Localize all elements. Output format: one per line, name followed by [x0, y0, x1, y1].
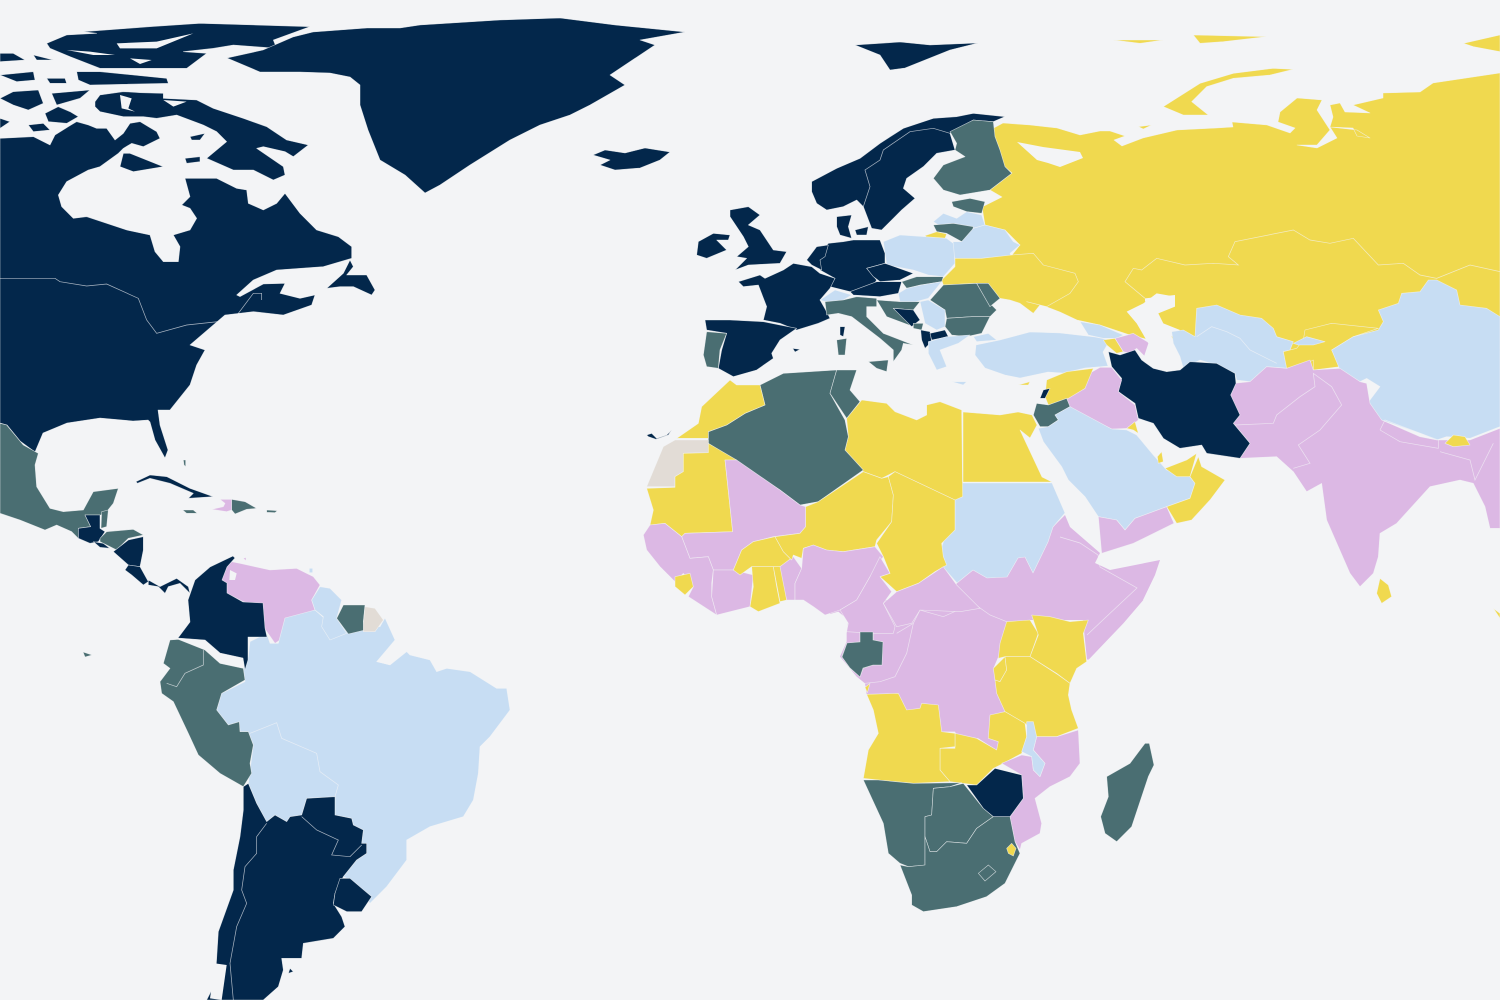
Cuba: [136, 475, 213, 498]
Fergana valley: [1293, 337, 1325, 345]
North Macedonia: [930, 330, 948, 340]
Ireland: [697, 233, 730, 258]
Ghana: [750, 567, 780, 612]
Cyprus: [1018, 382, 1030, 385]
Finland: [933, 120, 1012, 195]
Haiti: [212, 499, 232, 512]
Ecuador border: [167, 650, 203, 687]
Crete: [952, 382, 967, 385]
Serbia: [920, 300, 945, 330]
Bosnia: [893, 308, 920, 327]
Nepal border: [1380, 420, 1438, 448]
Romania: [930, 283, 997, 318]
DR Congo and neighbours: [830, 600, 1143, 750]
Caspian Sea: [1127, 293, 1180, 372]
Aruba: [243, 557, 246, 561]
Colombia: [178, 556, 267, 670]
Canada-USA border: [0, 278, 262, 333]
Sri Lanka: [1377, 578, 1392, 603]
Uzbekistan-Turkmenistan border: [1197, 327, 1277, 363]
South Asia: [1230, 360, 1500, 587]
Czechia: [867, 263, 913, 282]
Switzerland: [820, 290, 852, 302]
Patagonian fjords: [210, 963, 227, 1000]
Newfoundland: [327, 260, 375, 295]
Ellesmere Island: [47, 23, 310, 68]
Greece: [928, 335, 970, 370]
Niger: [775, 472, 893, 560]
Syria: [1045, 368, 1093, 405]
Iran: [1108, 350, 1250, 458]
Sierra Leone: [675, 573, 693, 595]
Burkina Faso: [733, 537, 792, 575]
Suriname: [337, 605, 365, 634]
Madagascar: [1101, 743, 1154, 842]
Namibia: [863, 780, 962, 867]
Arctic islands: [0, 53, 205, 172]
South Asia borders: [1235, 373, 1342, 468]
Tanzania: [995, 657, 1078, 737]
Western Sahara: [647, 440, 708, 487]
Falkland-side islet: [288, 968, 293, 973]
Estonia: [952, 198, 985, 213]
Amazon mouth: [377, 647, 395, 665]
Arctic channels: [67, 33, 193, 112]
Kolguev: [1138, 125, 1152, 129]
Lithuania: [933, 223, 973, 242]
Uzbekistan and Turkmenistan: [1172, 305, 1293, 382]
Canary Islands: [647, 430, 672, 439]
Georgia: [1080, 322, 1123, 338]
Egypt: [963, 412, 1052, 482]
Norway and Sweden: [812, 113, 1005, 230]
Trinidad: [309, 568, 313, 573]
mainland Canada and USA: [0, 122, 352, 458]
Zambia: [940, 712, 1027, 785]
Denmark: [837, 215, 852, 238]
Spain: [705, 320, 797, 377]
Congo border: [865, 623, 913, 683]
UAE: [1165, 453, 1197, 477]
region: South America: [160, 610, 510, 1000]
Portugal: [703, 332, 727, 368]
Cabinda: [865, 683, 870, 693]
Algeria: [708, 370, 863, 505]
Kenya: [1030, 615, 1088, 683]
Oman: [1167, 457, 1225, 523]
Eswatini: [1007, 843, 1016, 856]
Armenia: [1103, 338, 1123, 353]
Severnaya Zemlya: [1463, 35, 1500, 52]
Ethiopia, South Sudan and Somalia: [940, 515, 1160, 660]
Lake Maracaibo: [229, 570, 237, 580]
Zimbabwe: [967, 768, 1023, 817]
region: Central and Southern Africa: [830, 600, 1154, 912]
Uruguay: [333, 878, 372, 912]
Rwanda and Burundi: [993, 657, 1007, 682]
Venezuela: [222, 562, 320, 643]
Greenland: [227, 18, 685, 193]
Ethiopia and Somalia borders: [1060, 537, 1137, 635]
Baffin Island: [95, 92, 308, 180]
Kuwait: [1127, 422, 1138, 433]
Saudi Arabia: [1038, 407, 1195, 530]
Central African Republic: [883, 567, 980, 627]
Costa Rica: [125, 565, 148, 585]
region: North and West Africa: [643, 370, 980, 633]
Latvia: [933, 212, 985, 228]
region: Mexico, Central America and Caribbean: [0, 423, 320, 643]
Yemen: [1098, 507, 1174, 553]
Tunisia: [830, 370, 860, 418]
Bolivia border: [250, 723, 338, 797]
Mexico: [0, 423, 118, 538]
Ukraine: [942, 253, 1078, 313]
Qatar: [1157, 452, 1163, 463]
Croatia and Slovenia: [877, 300, 920, 327]
Iraq: [1067, 367, 1138, 429]
Dominican Republic: [232, 499, 257, 514]
Kazakhstan border: [1125, 230, 1500, 298]
Jamaica: [183, 510, 197, 513]
Turkish Thrace: [973, 333, 997, 342]
Chad: [877, 472, 955, 592]
Paraguay-Argentina border: [302, 817, 362, 857]
Morocco: [677, 380, 765, 438]
Slovakia: [902, 277, 943, 288]
Guatemala: [78, 515, 105, 543]
Brazil: [217, 610, 510, 903]
Puerto Rico: [267, 510, 277, 513]
Svalbard: [855, 42, 978, 70]
Gabon overlay: [842, 632, 883, 677]
Germany: [820, 240, 885, 292]
Guyana: [312, 587, 347, 640]
Benin: [780, 557, 802, 600]
Albania: [921, 330, 932, 348]
Jordan and Israel: [1033, 398, 1070, 427]
region: Middle East and Asia: [1033, 280, 1500, 618]
Bhutan: [1445, 435, 1470, 447]
Mozambique: [1002, 730, 1080, 850]
Angola: [863, 693, 955, 783]
El Salvador: [93, 542, 110, 548]
Galapagos: [83, 652, 92, 657]
Aral Sea: [1145, 295, 1175, 302]
Cameroon: [840, 557, 895, 633]
Ivory Coast: [712, 570, 753, 615]
Botswana: [925, 783, 993, 852]
Franz Josef Land: [1113, 40, 1163, 43]
Kyrgyzstan and Tajikistan: [1283, 323, 1378, 370]
Netherlands and Belgium: [807, 245, 828, 270]
Turkey: [975, 332, 1110, 378]
Malawi: [1022, 722, 1045, 777]
Gabon: [842, 632, 883, 677]
Mauritania: [647, 443, 737, 537]
France: [738, 263, 835, 330]
Bulgaria: [945, 317, 990, 337]
Honduras: [100, 529, 143, 550]
Togo: [773, 567, 787, 602]
Chile, Argentina and Paraguay: [207, 783, 367, 1000]
region: Canada and United States: [0, 23, 375, 458]
Sardinia: [837, 338, 847, 355]
Nigeria: [795, 545, 883, 615]
Peru and Ecuador: [160, 639, 253, 787]
Lesotho: [978, 865, 996, 881]
Sicily: [868, 360, 888, 372]
Danish islands: [855, 227, 868, 235]
Russia and Kazakhstan: [982, 73, 1500, 370]
Libya: [845, 400, 963, 500]
Mali: [682, 460, 806, 570]
Belarus: [952, 225, 1020, 258]
Poland: [883, 235, 955, 277]
Senegal and Guinea: [643, 523, 717, 615]
Austria: [850, 282, 902, 297]
Chile-Argentina border: [230, 823, 267, 1000]
Sumatra tip: [1493, 608, 1500, 618]
Lebanon: [1040, 388, 1050, 398]
Nicaragua: [113, 537, 143, 567]
Balearic Islands: [793, 348, 800, 352]
Hungary: [898, 282, 942, 303]
region: Guianas: [178, 556, 383, 670]
Bahamas: [183, 460, 186, 467]
Panama: [148, 578, 190, 593]
Uganda: [998, 620, 1038, 658]
Arctic islets: [1193, 35, 1267, 43]
Italy: [825, 297, 913, 362]
Norway-Sweden border: [863, 128, 950, 207]
United Kingdom: [730, 207, 787, 270]
Kaliningrad: [925, 232, 947, 238]
China: [1332, 280, 1500, 440]
DR Congo northern border: [913, 603, 1007, 623]
Azerbaijan: [1115, 333, 1150, 357]
Corsica: [840, 327, 845, 337]
Montenegro: [913, 323, 923, 330]
White Sea: [1017, 142, 1083, 167]
South Africa: [900, 817, 1020, 912]
Moldova: [977, 283, 1000, 307]
Iceland: [593, 148, 670, 170]
region: East and Central Africa base: [940, 412, 1160, 660]
Sudan: [940, 483, 1065, 583]
French Guiana: [363, 607, 383, 632]
Belize: [101, 510, 108, 528]
Bangladesh border: [1440, 443, 1493, 480]
Novaya Zemlya: [1163, 68, 1293, 115]
region: Russian Arctic islands and Kazakhstan border: [1113, 35, 1500, 302]
region: Europe: [697, 113, 1078, 385]
